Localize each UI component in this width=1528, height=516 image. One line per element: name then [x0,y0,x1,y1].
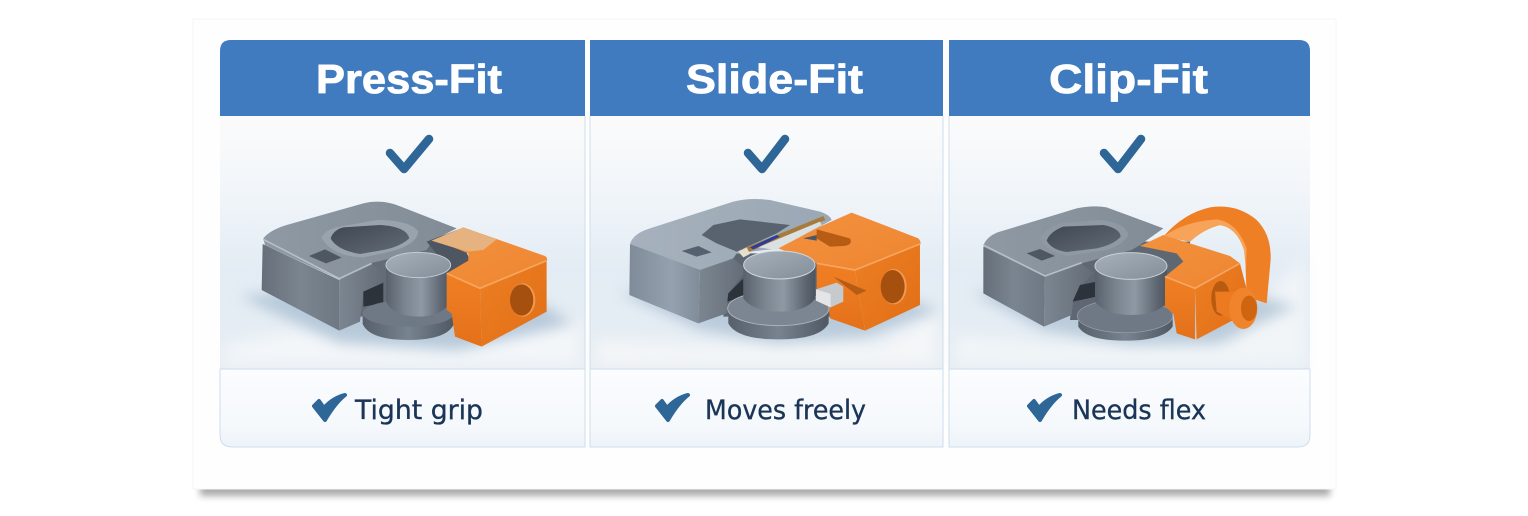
panel: Clip-Fit [949,40,1310,447]
caption: Needs flex [1029,395,1206,426]
illustration: slide-fit joint [620,199,940,343]
icon: caption check [657,395,688,420]
heading: Clip-Fit: Clip-Fit [1049,56,1208,102]
illustration: press-fit joint [240,202,573,350]
icon: top check mark [1104,139,1141,169]
heading: Press-Fit: Press-Fit [316,56,502,102]
caption text: Moves freely [705,395,866,426]
caption text: Tight grip [354,395,483,426]
heading: Slide-Fit: Slide-Fit [686,56,863,102]
card background [193,19,1336,496]
icon: caption check [1029,395,1060,420]
panel: Slide-Fit [590,40,943,447]
caption: Tight grip [314,395,483,426]
panel header: Slide-Fit [590,40,943,116]
icon: top check mark [390,139,429,169]
icon: caption check [314,395,345,420]
clip arch [1163,207,1271,303]
panel: Press-Fit [220,40,585,447]
panel header: Press-Fit [220,40,585,116]
panel header: Clip-Fit [949,40,1310,116]
caption: Moves freely [657,395,866,426]
icon: top check mark [748,139,785,169]
caption text: Needs flex [1072,395,1206,426]
illustration: clip-fit joint [973,206,1297,345]
